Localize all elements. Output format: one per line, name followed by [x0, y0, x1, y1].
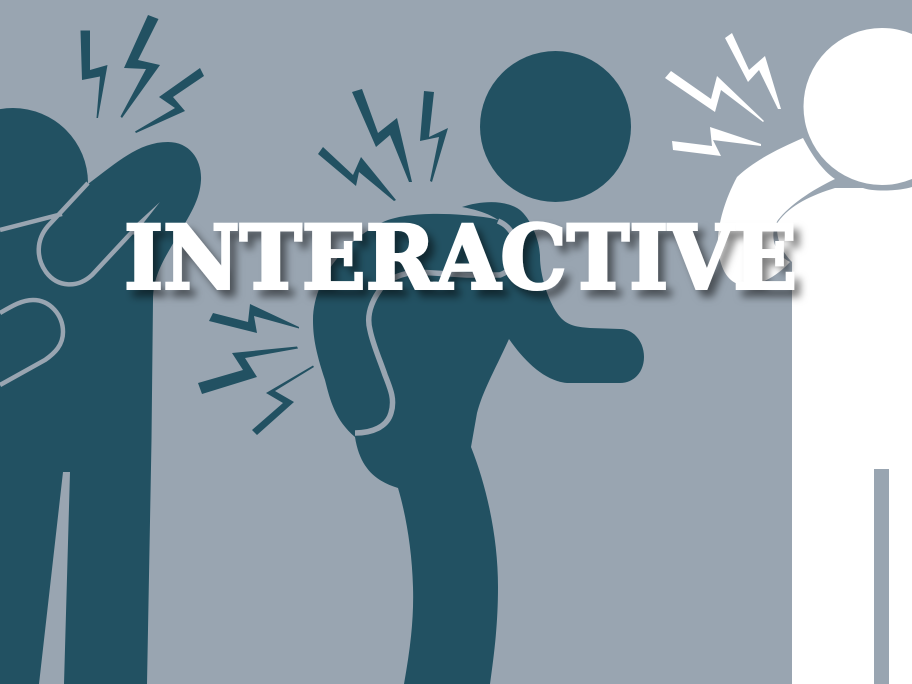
outline of raised arm: [0, 183, 132, 284]
raised arm of right person: [718, 138, 835, 285]
lightning bolts: left figure shoulder: [80, 15, 204, 133]
body of middle person: [313, 214, 644, 684]
figure: right person with neck pain: [718, 28, 912, 684]
body of right person: [777, 187, 912, 684]
outline of middle person's arm: [355, 221, 517, 433]
head of middle person: [480, 51, 631, 202]
head of left person: [0, 108, 88, 258]
lightning bolts: middle figure: [318, 89, 448, 201]
shoulder of middle person: [462, 202, 540, 257]
figure: left person with shoulder and back pain: [0, 108, 201, 684]
lightning bolts: left figure back: [198, 304, 314, 435]
arm outline taper: [130, 202, 160, 235]
head of right person: [804, 28, 912, 185]
outline of lower arm: [0, 300, 63, 385]
lightning bolts: right figure: [665, 33, 781, 156]
title: INTERACTIVE: [124, 206, 797, 310]
body of left person: [0, 142, 201, 684]
figure: middle person with back pain: [313, 51, 644, 684]
